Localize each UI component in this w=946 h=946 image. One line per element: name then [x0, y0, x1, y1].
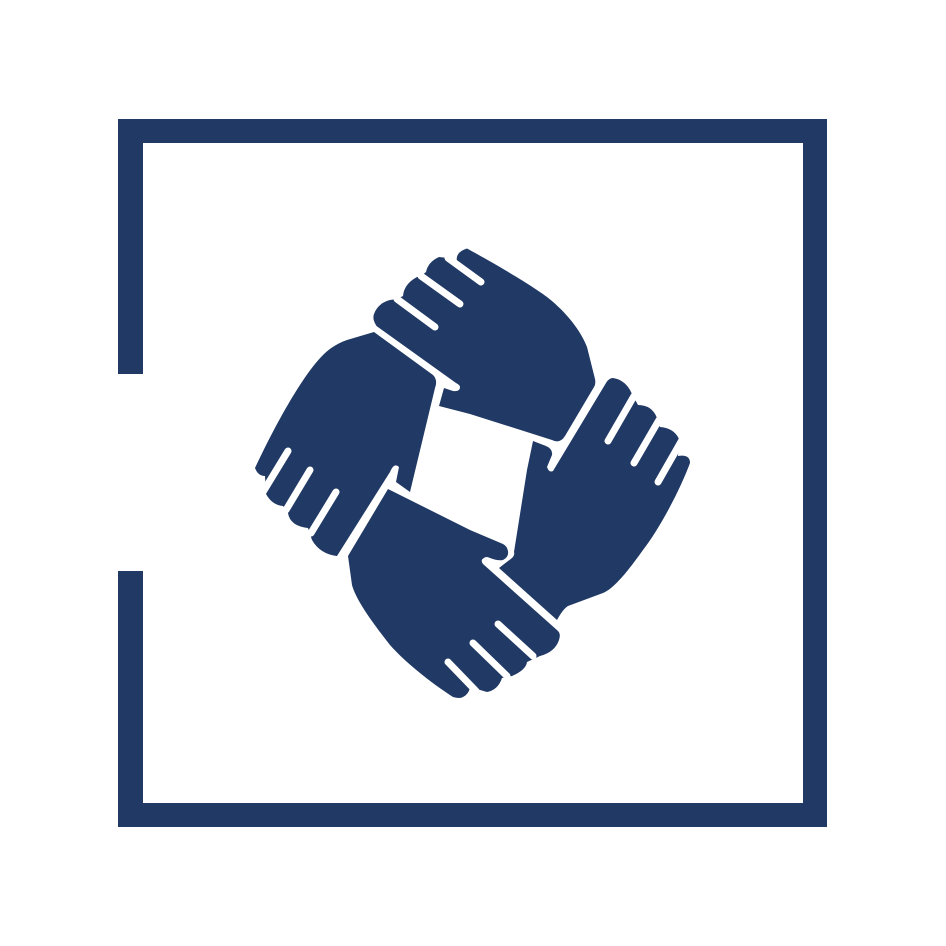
- finger gaps: [608, 396, 682, 482]
- hand: right: [499, 378, 690, 620]
- finger gaps: [448, 624, 533, 691]
- finger gaps: [397, 258, 481, 327]
- hand: left: [255, 332, 436, 556]
- finger gaps: [263, 451, 336, 533]
- hand: bottom: [348, 489, 560, 698]
- icon: four interlocking hands: [255, 248, 690, 698]
- hand: top: [373, 248, 595, 441]
- square frame with gap on left side: [118, 119, 827, 827]
